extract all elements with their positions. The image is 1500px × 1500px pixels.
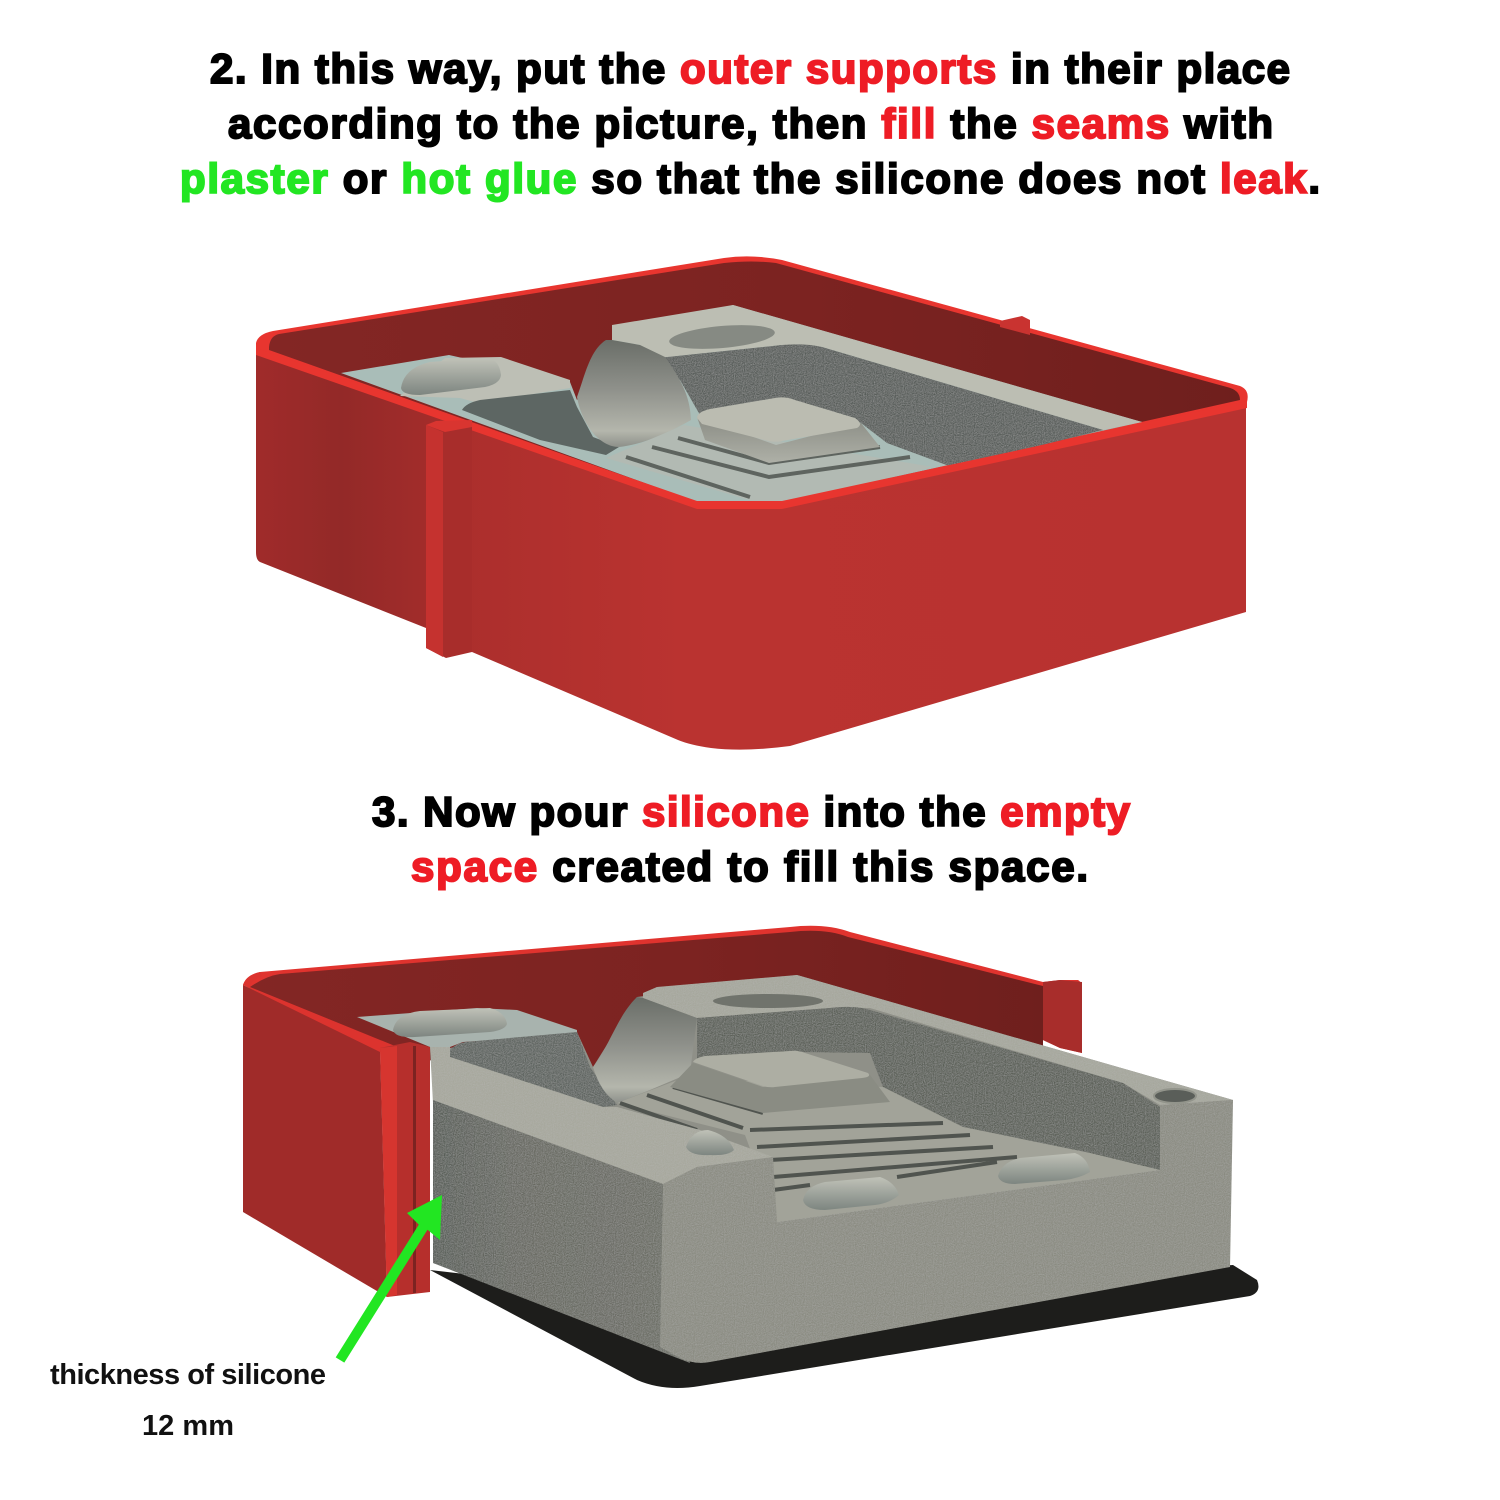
title: step 2 instructions: 2. In this way, put the outer supports in their place [210, 45, 1290, 92]
floor with ridges [617, 1078, 1160, 1222]
title: step 3 instructions: 3. Now pour silicone into the empty [372, 788, 1131, 835]
red back wall [243, 926, 1082, 1053]
rear top block [612, 305, 1142, 430]
left red wall [243, 985, 387, 1297]
title: step 3 instructions: space created to fill this space. [411, 843, 1088, 890]
left bump [401, 358, 501, 395]
saddle [593, 997, 697, 1103]
inner dark wall [697, 1007, 1160, 1170]
title: step 2 instructions [180, 45, 1320, 202]
front outer wall [440, 403, 1246, 750]
green arrow [336, 1195, 442, 1363]
left pit [450, 1032, 617, 1107]
left raised block [400, 357, 570, 403]
left front face [433, 1100, 690, 1363]
slot [713, 994, 823, 1008]
title: step 2 instructions: plaster or hot glue so that the silicone does not leak. [180, 155, 1320, 202]
front bump right [998, 1153, 1090, 1184]
hole [1154, 1089, 1196, 1103]
front top rim [430, 1047, 773, 1184]
illustration: mold with outer red supports [256, 256, 1248, 750]
front bump left [803, 1177, 899, 1210]
left outer wall [256, 350, 445, 640]
teal base of mold [341, 305, 1142, 502]
slot [668, 321, 776, 353]
dark pit [462, 390, 619, 455]
title: step 2 instructions: according to the picture, then fill the seams with [228, 100, 1273, 147]
illustration: mold with silicone poured and thickness callout [50, 926, 1258, 1442]
curved saddle [577, 340, 691, 447]
callout: silicone thickness: thickness of silicone [50, 1359, 326, 1391]
pedestal [670, 1063, 890, 1113]
back walls and rim [256, 256, 1248, 507]
callout: silicone thickness: 12 mm [142, 1410, 234, 1442]
left block bump [393, 1008, 507, 1037]
front tab [426, 425, 472, 658]
left wall rim [243, 972, 395, 1052]
right front face [660, 1100, 1233, 1363]
front rim [256, 348, 1247, 509]
black base plate [430, 1265, 1258, 1388]
corner bump [686, 1130, 734, 1155]
grey base of block [433, 975, 1233, 1222]
title: step 3 instructions [372, 788, 1131, 890]
inner dark wall [658, 344, 1103, 467]
ridge lines [620, 1087, 1017, 1190]
stepped floor [606, 425, 933, 502]
central pedestal [697, 417, 880, 463]
callout: silicone thickness [50, 1359, 326, 1442]
back tab [1043, 980, 1082, 1053]
rear top strip [643, 975, 1233, 1105]
left raised block [357, 1008, 577, 1047]
back tab [1000, 316, 1030, 335]
red seam tab [380, 1042, 430, 1297]
